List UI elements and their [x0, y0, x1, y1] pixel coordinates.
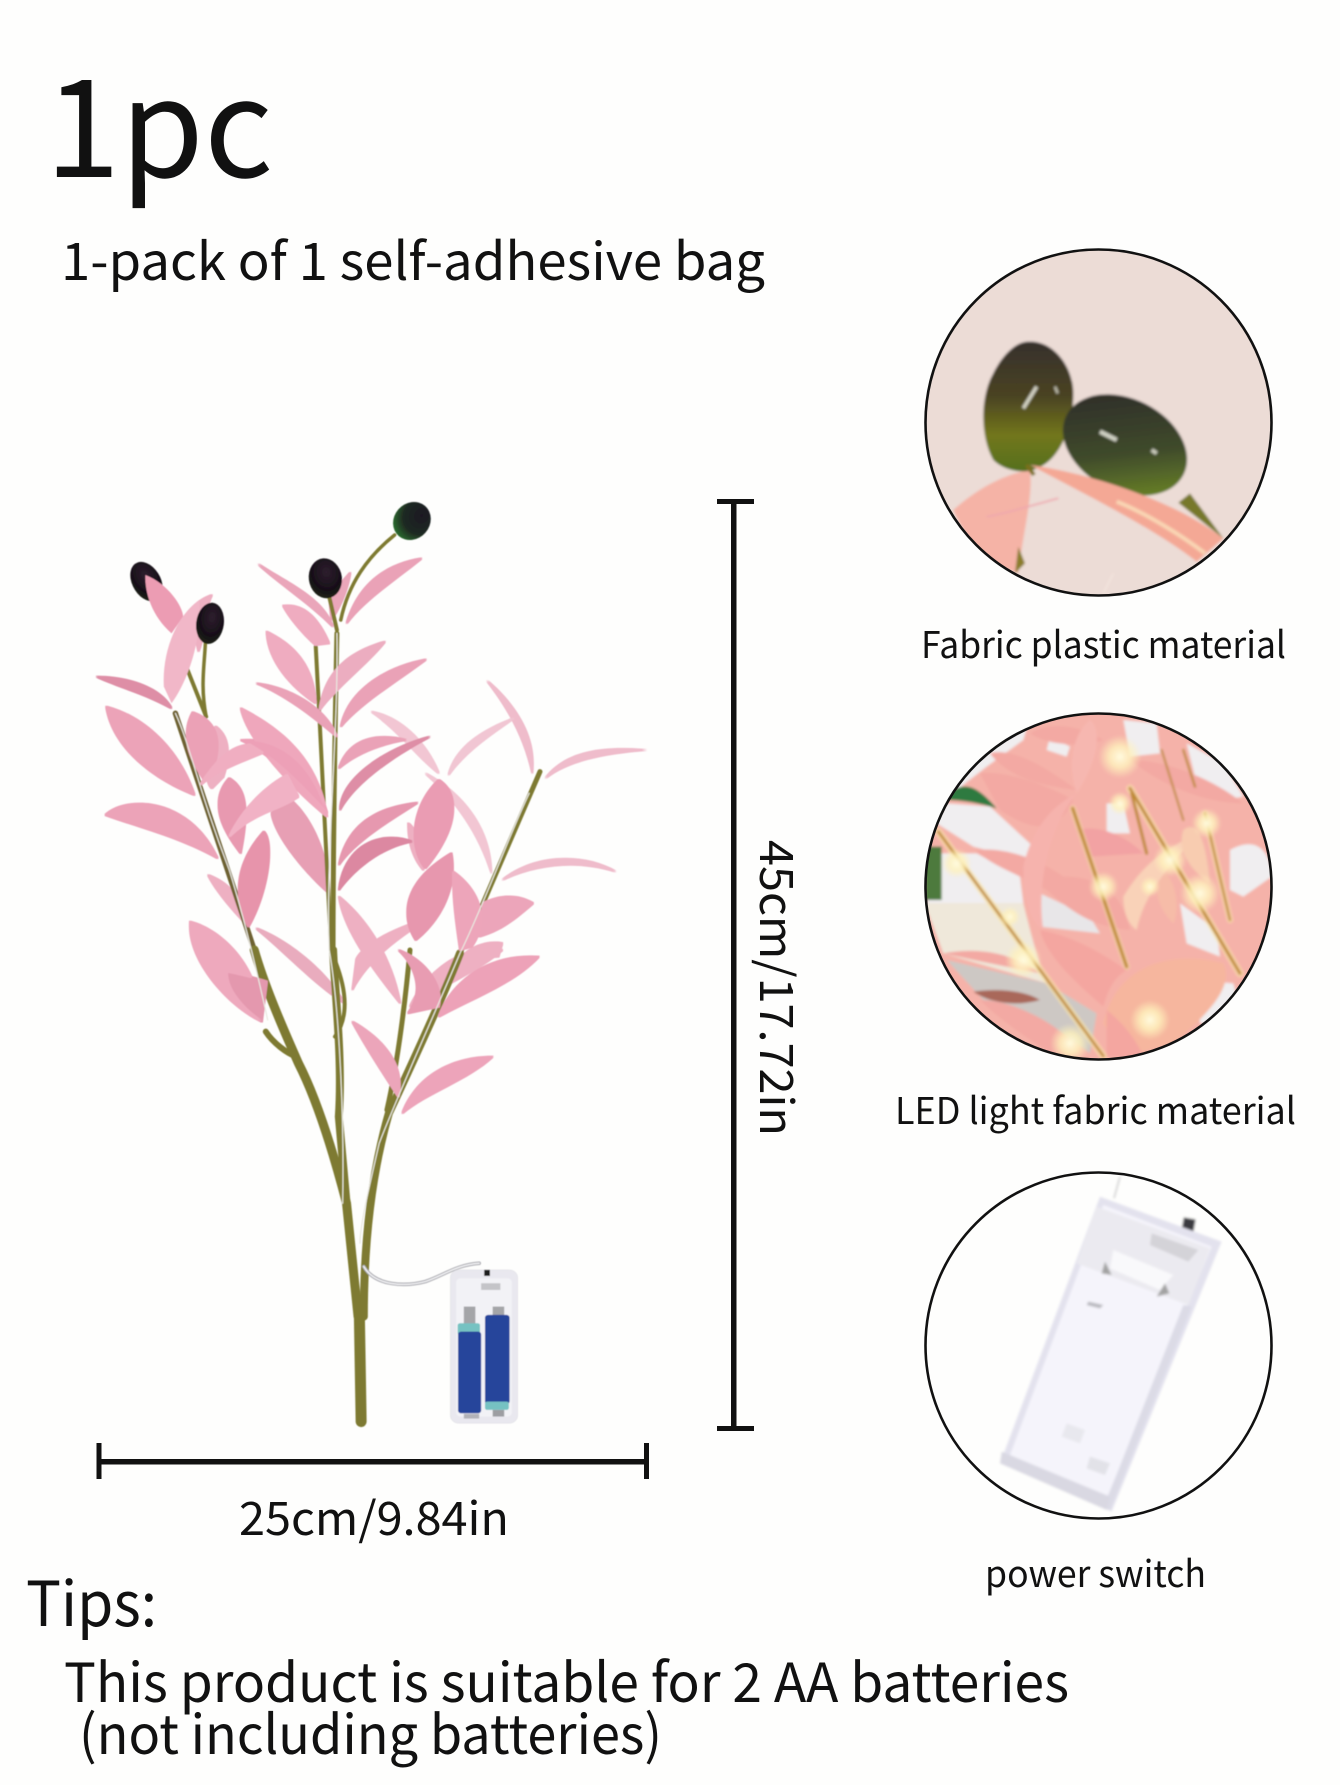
detail circle: olives: [923, 247, 1277, 600]
tips text block: (not including batteries): [79, 1691, 662, 1770]
width label: 25cm/9.84in: [239, 1483, 509, 1549]
height label: 45cm/17.72in: [746, 840, 812, 1136]
product illustration: olive branch with battery box: [97, 498, 647, 1423]
tips text block: This product is suitable for 2 AA batteries: [64, 1639, 1069, 1718]
subtitle: 1-pack of 1 self-adhesive bag: [61, 220, 765, 295]
tips text block: [64, 1639, 1069, 1770]
stems: [175, 535, 540, 1422]
width dimension line: [96, 1443, 649, 1479]
tips heading: Tips:: [26, 1554, 157, 1644]
title: 1pc: 1pc: [45, 20, 273, 217]
caption: fabric plastic material: Fabric plastic material: [921, 615, 1286, 669]
fairy light wire: [175, 633, 529, 1243]
caption: power switch: power switch: [985, 1544, 1206, 1598]
caption: LED light fabric material: LED light fabric material: [895, 1081, 1296, 1135]
front leaves: [97, 558, 539, 1113]
back leaves: [191, 564, 647, 1007]
detail circle: battery box power switch: [923, 1170, 1277, 1523]
height dimension line: [717, 499, 754, 1431]
olives: [124, 498, 436, 703]
detail circle: LED lights on leaves: [923, 710, 1277, 1063]
battery box: [364, 1263, 518, 1423]
